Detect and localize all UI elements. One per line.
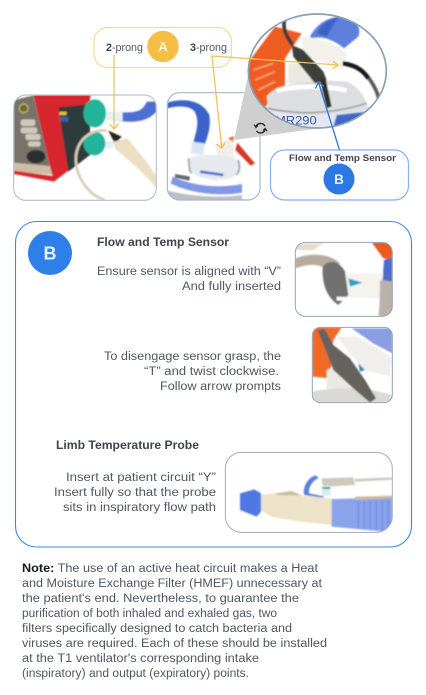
callout B: flow and temp sensor [270, 150, 408, 200]
note text: the patient's end. Nevertheless, to guarantee the [22, 593, 299, 605]
heading: flow and temp sensor: Flow and Temp Sensor [97, 237, 230, 249]
photo: humidifier chamber with three-prong connection [167, 93, 260, 203]
photo: ventilator with two-prong filter connection [14, 95, 156, 200]
photo: limb temperature probe [225, 452, 392, 532]
note text: at the T1 ventilator's corresponding intake [22, 653, 259, 665]
heading: limb temperature probe: Limb Temperature Probe [56, 440, 199, 452]
note text: Note: The use of an active heat circuit makes a Heat [22, 563, 319, 575]
text: probe instruction: Insert at patient circuit “Y” [66, 472, 216, 484]
text: alignment instruction [97, 266, 281, 293]
text: alignment instruction: Ensure sensor is aligned with “V” [97, 266, 281, 278]
text: disengage instruction: Follow arrow prompts [160, 381, 281, 393]
text: disengage instruction: To disengage sensor grasp, the [104, 351, 281, 363]
label: 3-prong: 3-prong [190, 42, 227, 54]
badge B large: B [44, 244, 56, 264]
arrow: 2-prong to ventilator [110, 55, 118, 129]
magnified label: MR290: MR290 [275, 113, 317, 127]
text: probe instruction: sits in inspiratory flow path [63, 502, 216, 514]
text: alignment instruction: And fully inserted [182, 281, 281, 293]
photo: sensor aligned with V [295, 242, 393, 316]
text: probe instruction [54, 472, 216, 514]
note text: (inspiratory) and output (expiratory) points. [22, 668, 249, 680]
callout B: flow and temp sensor: Flow and Temp Sensor [289, 153, 396, 164]
text: disengage instruction [104, 351, 281, 393]
note text: filters specifically designed to catch bacteria and [22, 623, 292, 635]
magnifier cone [234, 70, 318, 140]
note text [22, 563, 327, 680]
badge A: A [158, 40, 168, 54]
panel A: prong types [94, 28, 232, 68]
icon: twist arrow [254, 123, 267, 133]
magnified view of sensor connection [247, 14, 386, 128]
arrow: callout B to sensor [316, 82, 340, 150]
photo: grasp T and twist [312, 327, 392, 403]
badge B large [28, 231, 72, 275]
panel B: sensor instructions [16, 222, 412, 547]
text: probe instruction: Insert fully so that the probe [54, 487, 216, 499]
label: 2-prong: 2-prong [106, 42, 143, 54]
arrow: 3-prong to magnified view [212, 56, 338, 69]
arrow: 3-prong to chamber [212, 56, 225, 148]
note text: viruses are required. Each of these should be installed [22, 638, 327, 650]
note text: and Moisture Exchange Filter (HMEF) unnecessary at [22, 578, 323, 590]
badge B: B [334, 172, 344, 187]
note text: purification of both inhaled and exhaled gas, two [22, 608, 277, 620]
text: disengage instruction: “T” and twist clockwise. [144, 366, 279, 378]
